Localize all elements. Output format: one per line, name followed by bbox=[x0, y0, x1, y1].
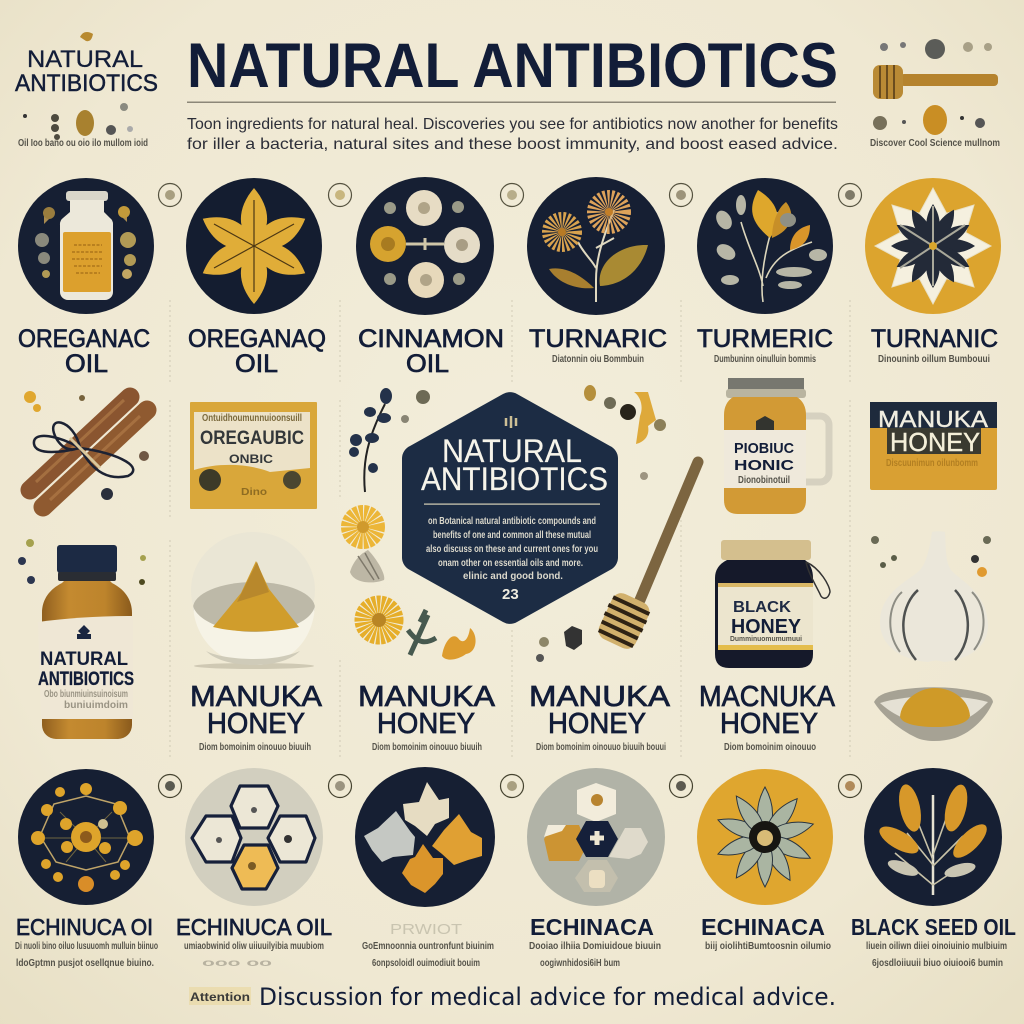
panel: central hexagon: also discuss on these and current ones for you bbox=[426, 544, 598, 555]
label: cinnamon oil bbox=[358, 325, 504, 378]
panel: central hexagon: benefits of one and common all these mutual bbox=[433, 530, 591, 541]
label: macnuka honey bbox=[699, 681, 836, 753]
label: cinnamon oil: CINNAMON bbox=[358, 325, 504, 353]
label: macnuka honey: HONEY bbox=[720, 708, 818, 740]
label: manuka honey 3: Diom bomoinim oinouuo biuuih bouui bbox=[536, 742, 666, 753]
panel: central hexagon: ANTIBIOTICS bbox=[421, 461, 608, 497]
header logo: left bbox=[15, 32, 158, 149]
panel: oregano oil circle bbox=[18, 178, 154, 314]
label: oregano oil 1: OREGANAC bbox=[18, 325, 150, 353]
label: turmeric: Dumbuninn oinulluin bommis bbox=[714, 354, 816, 365]
icon: cinnamon sticks bbox=[24, 391, 149, 507]
label: macnuka honey: MACNUKA bbox=[699, 681, 836, 713]
label: echinaca 1: Dooiao ilhiia Domiuidoue biuuin bbox=[529, 941, 661, 952]
panel: manuka honey box: Discuunimun oilunbomm bbox=[886, 458, 978, 469]
icon: bowl of turmeric bbox=[191, 532, 315, 669]
header logo: left: Oil Ioo bano ou oio ilo mullom ioid bbox=[18, 138, 148, 149]
panel: oregano box: ONBIC bbox=[229, 452, 273, 466]
label: echinaca 2 bbox=[701, 914, 831, 952]
subtitle bbox=[187, 116, 838, 153]
icon: black honey jar: Dumminuomumumuui bbox=[730, 636, 802, 643]
panel: echinacea oil circle bbox=[18, 769, 154, 905]
icon: natural antibiotics bottle bbox=[18, 539, 146, 739]
label: manuka honey 3: HONEY bbox=[548, 708, 646, 740]
icon: natural antibiotics bottle: NATURAL bbox=[40, 649, 128, 670]
label: turmeric: TURMERIC bbox=[697, 325, 833, 353]
panel: central hexagon bbox=[402, 392, 618, 624]
icon: sprig and seeds bbox=[349, 388, 430, 492]
panel: black seed circle bbox=[864, 768, 1002, 906]
panel: honey mug bbox=[724, 378, 829, 514]
icon: natural antibiotics bottle: ANTIBIOTICS bbox=[38, 669, 134, 690]
label: echinaca 2: ECHINACA bbox=[701, 914, 825, 940]
icon: black honey jar: BLACK bbox=[733, 599, 791, 616]
panel: honey mug: HONIC bbox=[734, 457, 794, 474]
icon: natural antibiotics bottle: Obo biunmiuinsuinoisum bbox=[44, 689, 128, 700]
label: echinuca oil 1 bbox=[15, 914, 158, 969]
panel: central hexagon: on Botanical natural antibiotic compounds and bbox=[428, 516, 596, 527]
icon: number badges row four bbox=[158, 774, 862, 798]
icon: garlic bbox=[871, 531, 991, 662]
footer disclaimer: Discussion for medical advice for medical advice. bbox=[259, 983, 836, 1011]
icon: honey dipper header bbox=[870, 39, 1000, 149]
icon: black honey jar bbox=[715, 540, 830, 668]
label: echinuca oil 2 bbox=[176, 914, 332, 969]
icon: dish of powder bbox=[874, 687, 993, 741]
label: turnaric: Diatonnin oiu Bommbuin bbox=[552, 354, 644, 365]
label: oregano oil 2: OIL bbox=[235, 350, 278, 378]
label: echinaca 2: biij oiolihtiBumtoosnin oilumio bbox=[705, 941, 831, 952]
label: echinaca 1: oogiwnhidosi6iH bum bbox=[540, 958, 620, 969]
label: echinuca oil 2: umiaobwinid oliw uiiuuilyibia muubiom bbox=[184, 941, 324, 952]
icon: seeds and flowers right of hexagon bbox=[536, 385, 666, 662]
panel: hex cluster circle bbox=[527, 768, 665, 906]
icon: number badges row one bbox=[158, 184, 862, 206]
panel: manuka honey box: HONEY bbox=[890, 427, 980, 457]
label: turnaric: TURNARIC bbox=[529, 325, 667, 353]
panel: honey mug: PIOBIUC bbox=[734, 440, 794, 457]
label: faded heading and text: GoEmnoonnia ountronfunt biuinim bbox=[362, 941, 494, 952]
panel: central hexagon: onam other on essential oils and more. bbox=[438, 558, 583, 569]
label: turmeric bbox=[697, 325, 833, 365]
panel: central hexagon: elinic and good bond. bbox=[463, 571, 563, 582]
label: faded heading and text: 6onpsoloidl ouimodiuit bouim bbox=[372, 958, 480, 969]
label: oregano oil 1: OIL bbox=[65, 350, 108, 378]
panel: cinnamon oil circle bbox=[356, 177, 494, 315]
label: manuka honey 1: Diom bomoinim oinouuo biuuih bbox=[199, 742, 311, 753]
label: black seed oil: 6josdloiiuuii biuo oiuiooi6 bumin bbox=[872, 958, 1003, 969]
label: faded heading and text bbox=[362, 921, 494, 969]
panel: oregano box: Dino bbox=[241, 487, 267, 498]
icon: honey dipper large bbox=[594, 462, 698, 653]
label: manuka honey 1: HONEY bbox=[207, 708, 305, 740]
label: turnanic: TURNANIC bbox=[871, 325, 998, 353]
label: manuka honey 2: Diom bomoinim oinouuo biuuih bbox=[372, 742, 482, 753]
label: faded heading and text: PRWIOT bbox=[390, 921, 462, 938]
label: manuka honey 2 bbox=[358, 681, 496, 753]
label: manuka honey 2: HONEY bbox=[377, 708, 475, 740]
label: turnanic bbox=[871, 325, 998, 365]
panel: oregano box bbox=[190, 402, 317, 509]
panel: oregano box: OREGAUBIC bbox=[200, 428, 304, 449]
panel: gems circle bbox=[355, 767, 495, 907]
subtitle: for iller a bacteria, natural sites and these boost immunity, and boost eased advice. bbox=[187, 136, 838, 153]
label: manuka honey 3 bbox=[529, 681, 671, 753]
panel: manuka honey box bbox=[870, 402, 997, 490]
label: echinuca oil 2: ooo oo bbox=[202, 958, 272, 969]
label: echinuca oil 1: ldoGptmn pusjot osellqnue biuino. bbox=[16, 958, 154, 969]
label: manuka honey 2: MANUKA bbox=[358, 681, 496, 713]
footer disclaimer: Attention bbox=[190, 990, 250, 1004]
panel: central hexagon: 23 bbox=[502, 586, 519, 603]
icon: flowers left of hexagon bbox=[350, 515, 476, 660]
panel: gold flower circle bbox=[697, 769, 833, 905]
panel: manuka honey box: MANUKA bbox=[878, 406, 989, 432]
panel: turmeric star circle bbox=[865, 178, 1001, 314]
panel: oregano flower circle bbox=[186, 178, 322, 314]
label: manuka honey 1: MANUKA bbox=[190, 681, 323, 713]
panel: turmeric plant circle bbox=[697, 178, 833, 314]
label: echinaca 1 bbox=[529, 914, 661, 969]
label: echinuca oil 1: Di nuoli bino oiluo lusuuomh mulluin biinuo bbox=[15, 941, 158, 952]
subtitle: Toon ingredients for natural heal. Discoveries you see for antibiotics now another for benefits bbox=[187, 116, 838, 133]
label: manuka honey 3: MANUKA bbox=[529, 681, 671, 713]
label: manuka honey 1 bbox=[190, 681, 323, 753]
panel: turmeric flower circle bbox=[527, 177, 665, 315]
panel: central hexagon: NATURAL bbox=[442, 433, 582, 469]
header logo: left: NATURAL bbox=[27, 46, 143, 73]
label: oregano oil 2 bbox=[188, 325, 326, 378]
panel: honey mug: Dionobinotuil bbox=[738, 475, 790, 486]
icon: natural antibiotics bottle: buniuimdoim bbox=[64, 700, 128, 711]
title: NATURAL ANTIBIOTICS bbox=[187, 31, 838, 101]
icon: black honey jar: HONEY bbox=[731, 616, 802, 638]
label: macnuka honey: Diom bomoinim oinouuo bbox=[724, 742, 816, 753]
label: black seed oil bbox=[851, 914, 1016, 969]
icon: honey dipper header: Discover Cool Science mullnom bbox=[870, 138, 1000, 149]
panel: echinacea hexagons circle bbox=[185, 768, 323, 906]
label: echinaca 1: ECHINACA bbox=[530, 914, 654, 940]
header logo: left: ANTIBIOTICS bbox=[15, 70, 158, 97]
label: oregano oil 2: OREGANAQ bbox=[188, 325, 326, 353]
label: echinuca oil 1: ECHINUCA OI bbox=[16, 914, 153, 940]
label: echinuca oil 2: ECHINUCA OIL bbox=[176, 914, 332, 940]
label: turnaric bbox=[529, 325, 667, 365]
label: turnanic: Dinouninb oillum Bumbouui bbox=[878, 354, 990, 365]
label: cinnamon oil: OIL bbox=[406, 350, 449, 378]
label: oregano oil 1 bbox=[18, 325, 150, 378]
panel: oregano box: Ontuidhoumunnuioonsuill bbox=[202, 413, 302, 424]
